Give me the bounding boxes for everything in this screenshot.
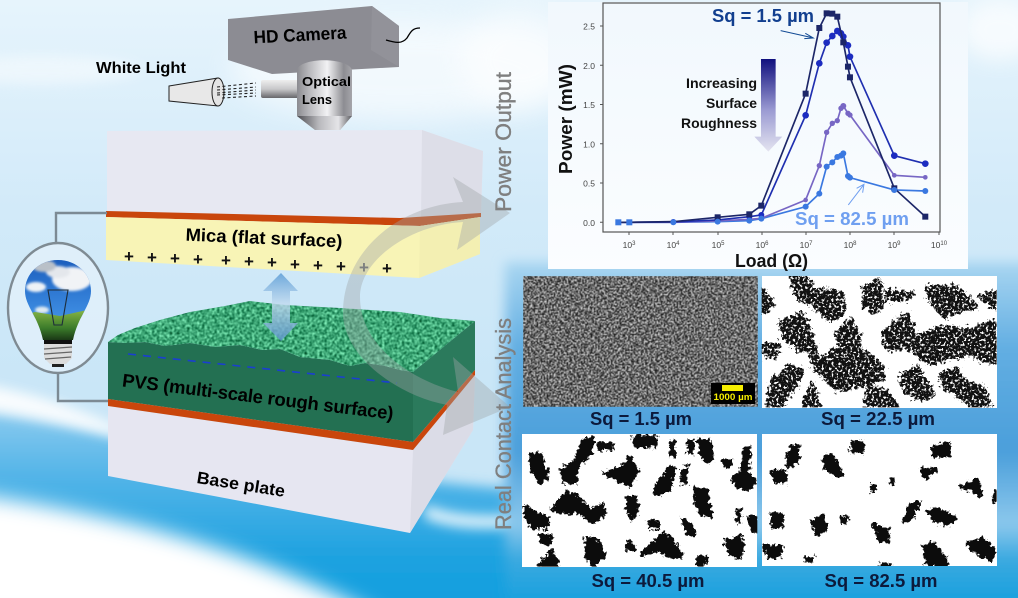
chart frame	[603, 3, 940, 232]
roughness label: Surface	[706, 95, 757, 111]
x tick labels: 3	[632, 241, 636, 247]
orange electrode	[106, 211, 481, 226]
positive charges: +	[382, 259, 392, 278]
panel: contact images	[522, 273, 1000, 591]
y tick labels	[583, 22, 595, 228]
lens label: Optical	[302, 74, 351, 89]
positive charges: +	[124, 247, 134, 266]
series: Sq 40.5	[618, 106, 925, 222]
camera	[228, 6, 420, 74]
series: Sq 22.5	[618, 31, 925, 222]
callout: Sq 1.5: Sq = 1.5 µm	[712, 6, 814, 26]
positive charges: +	[313, 256, 323, 275]
image: Sq 40.5	[522, 434, 758, 568]
x tick labels: 10	[940, 241, 948, 247]
y tick labels: 2.5	[583, 22, 595, 32]
panel: power chart	[548, 2, 968, 271]
series: Sq 1.5	[618, 13, 925, 222]
x tick labels: 6	[765, 241, 769, 247]
camera label: HD Camera	[253, 23, 348, 47]
roughness label: Roughness	[681, 115, 757, 131]
positive charges: +	[221, 251, 231, 270]
heading: power output: Power Output	[491, 72, 516, 212]
light series markers	[615, 150, 928, 225]
white light label: White Light	[96, 60, 187, 77]
positive charges: +	[147, 248, 157, 267]
optical lens	[261, 60, 352, 130]
wires	[56, 213, 108, 401]
x tick labels: 10	[844, 240, 853, 250]
icon: light source cone	[169, 78, 256, 106]
orange electrode	[108, 370, 475, 450]
callout: Sq 82.5: Sq = 82.5 µm	[795, 209, 909, 229]
cable	[386, 28, 420, 42]
callout arrow: Sq 1.5	[781, 31, 813, 39]
heading: real contact analysis: Real Contact Analysis	[491, 318, 516, 530]
image labels: Sq = 1.5 µm	[590, 409, 692, 429]
x tick labels: 7	[809, 241, 813, 247]
roughness label: Increasing	[686, 75, 757, 91]
scale bar: 1000 µm	[714, 392, 752, 402]
lower block: PVS assembly	[100, 295, 480, 533]
dashed mean line	[128, 354, 397, 383]
axis ticks	[600, 26, 939, 235]
positive charges: +	[290, 255, 300, 274]
x tick labels: 10	[623, 240, 632, 250]
image labels: Sq = 82.5 µm	[824, 571, 938, 591]
image labels: Sq = 22.5 µm	[821, 409, 935, 429]
base plate	[108, 375, 475, 533]
positive charges: +	[170, 249, 180, 268]
series: Sq 82.5	[618, 153, 925, 222]
double arrow	[263, 273, 298, 341]
y tick labels: 0.5	[583, 178, 595, 188]
callout arrow: Sq 82.5	[848, 184, 864, 205]
positive charges: +	[267, 253, 277, 272]
y axis title: Power (mW)	[556, 64, 576, 174]
x tick labels: 5	[721, 241, 725, 247]
y tick labels: 2.0	[583, 61, 595, 71]
upper block: mica assembly	[106, 130, 483, 278]
rough surface	[108, 301, 475, 372]
x tick labels: 10	[756, 240, 765, 250]
x tick labels	[623, 240, 948, 250]
x tick labels: 4	[676, 241, 680, 247]
y tick labels: 1.0	[583, 139, 595, 149]
image: Sq 22.5	[760, 273, 1000, 410]
x tick labels: 10	[931, 240, 940, 250]
x tick labels: 8	[853, 241, 857, 247]
x tick labels: 10	[712, 240, 721, 250]
PVS front	[108, 342, 413, 442]
PVS label: PVS (multi-scale rough surface)	[121, 369, 395, 424]
positive charges: +	[359, 258, 369, 277]
curved arrow	[343, 177, 510, 435]
image labels	[590, 409, 938, 591]
y tick labels: 1.5	[583, 100, 595, 110]
PVS side	[413, 321, 475, 442]
positive charges: +	[244, 252, 254, 271]
mica layer	[106, 217, 480, 278]
y tick labels: 0.0	[583, 218, 595, 228]
x tick labels: 10	[800, 240, 809, 250]
x tick labels: 9	[897, 241, 901, 247]
roughness gradient arrow	[754, 59, 782, 152]
positive charges: +	[193, 250, 203, 269]
image: Sq 1.5	[523, 276, 758, 407]
optical lens: Lens	[302, 92, 332, 107]
data series	[615, 10, 929, 225]
roughness label	[681, 75, 757, 131]
image: Sq 82.5	[762, 434, 998, 568]
base plate label: Base plate	[195, 468, 286, 501]
x axis title: Load (Ω)	[735, 251, 808, 271]
icon: light bulb	[8, 243, 108, 373]
positive charges: +	[336, 257, 346, 276]
x tick labels: 10	[667, 240, 676, 250]
scale bar	[711, 383, 755, 404]
top electrode block	[107, 130, 483, 220]
positive charges	[124, 247, 392, 278]
mica label: Mica (flat surface)	[185, 225, 343, 251]
image labels: Sq = 40.5 µm	[592, 571, 704, 591]
x tick labels: 10	[888, 240, 897, 250]
